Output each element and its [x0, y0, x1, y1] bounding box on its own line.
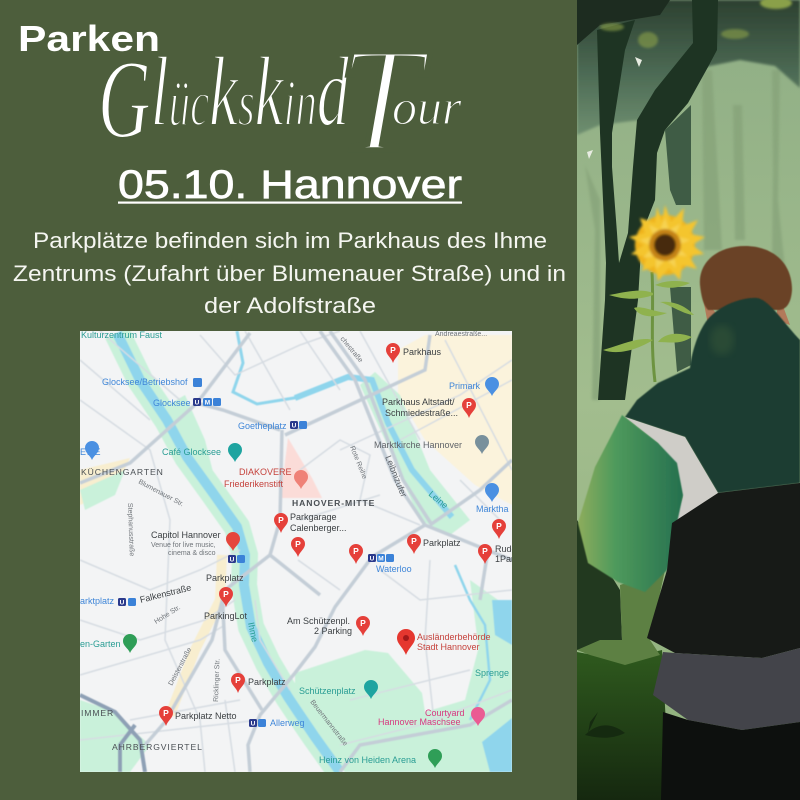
map pin: parking centre: P [295, 539, 301, 549]
map pin: Parkplatz south [231, 673, 245, 693]
map labels: streets and districts: en-Garten [80, 639, 121, 649]
map labels: streets and districts: Glocksee/Betriebshof [102, 377, 188, 387]
map pin: parking centre [291, 537, 305, 557]
heading: Glückskind Tour: our [392, 79, 462, 135]
map labels: streets and districts: Schützenplatz [299, 686, 356, 696]
map pin: Am Schützenplatz: P [360, 618, 366, 628]
map labels: streets and districts: EWE [80, 447, 101, 457]
map pin: Parkplatz Leine [407, 534, 421, 554]
map labels: streets and districts: Leibnizufer [383, 454, 409, 499]
map icons: transit and places: U [292, 422, 297, 430]
ground plant shadows [585, 712, 625, 738]
heading: Glückskind Tour: ückskind [169, 37, 349, 148]
map labels: streets and districts: Stadt Hannover [417, 642, 480, 652]
map labels: streets and districts: Beuermannstraße [308, 699, 348, 747]
map labels: streets and districts: Friederikenstift [224, 479, 284, 489]
map labels: streets and districts: Hohe Str. [153, 604, 182, 626]
map labels: streets and districts: Calenberger... [290, 523, 347, 533]
map labels: streets and districts: Primark [449, 381, 480, 391]
canopy leaves [600, 0, 792, 48]
map labels: streets and districts [80, 330, 517, 765]
map pin: Parkgarage Calenberger [274, 513, 288, 533]
map pin: parking east edge: P [496, 521, 502, 531]
map labels: streets and districts: Venue for live music, [151, 542, 216, 549]
map labels: streets and districts: Glocksee [153, 398, 191, 408]
map icons: transit and places: M [378, 556, 384, 562]
map labels: streets and districts: Courtyard [425, 708, 465, 718]
map labels: streets and districts: Sprenge [475, 668, 509, 678]
illustration: forest and person [577, 0, 800, 800]
map labels: streets and districts: Waterloo [376, 564, 412, 574]
person: green sleeve [578, 415, 683, 592]
person: grey hem [653, 648, 800, 730]
map icons: transit and places: U [251, 720, 256, 728]
heading: Glückskind Tour: l [151, 37, 169, 148]
map pin: ParkingLot [219, 587, 233, 607]
map labels: streets and districts: Blumenauer Str. [137, 479, 185, 508]
map labels: streets and districts: Ausländerbehörde [417, 632, 491, 642]
map labels: streets and districts: Goetheplatz [238, 421, 287, 431]
background trees [585, 70, 785, 400]
map icons: transit and places: U [195, 400, 200, 406]
map labels: streets and districts: Hannover Maschsee [378, 717, 461, 727]
map icons: transit and places: U [230, 556, 235, 564]
person: jacket hood [625, 298, 800, 493]
map labels: streets and districts: Rude [495, 544, 517, 554]
map pin: Ausländerbehörde destination [397, 629, 415, 655]
person: black torso [647, 483, 800, 658]
map pin: Rude parking: P [482, 546, 488, 556]
map pin: Parkplatz Netto [159, 706, 173, 726]
person: hair and skin [700, 246, 792, 325]
main dark trunks [597, 0, 718, 400]
map labels: streets and districts: Parkplatz Netto [175, 711, 237, 721]
sunflower [603, 205, 705, 382]
map labels: streets and districts: arktplatz [80, 596, 115, 606]
map labels: streets and districts: Parkhaus [403, 347, 442, 357]
map labels: streets and districts: KÜCHENGARTEN [81, 467, 164, 477]
map labels: streets and districts: Schmiedestraße... [385, 408, 458, 418]
map labels: streets and districts: Parkplatz [423, 538, 461, 548]
map labels: streets and districts: Deisterstraße [168, 646, 194, 687]
text block: parking description: Zentrums (Zufahrt über Blumenauer Straße) und in [13, 261, 566, 286]
map labels: streets and districts: 2 Parking [314, 626, 352, 636]
map labels: streets and districts: Rote Reihe [348, 445, 368, 480]
heading: Glückskind Tour: G [98, 39, 151, 162]
map labels: streets and districts: HANOVER-MITTE [292, 498, 375, 508]
map labels: streets and districts: Parkplatz [248, 677, 286, 687]
map labels: streets and districts: Ricklinger Str. [213, 659, 222, 702]
map labels: streets and districts: Stephanusstraße [126, 503, 135, 556]
map icons: transit and places: U [120, 600, 125, 606]
map labels: streets and districts: Marktkirche Hannover [374, 440, 462, 450]
heading: date and city: 05.10. Hannover [118, 163, 462, 207]
map labels: streets and districts: AHRBERGVIERTEL [112, 742, 203, 752]
person: white panel [625, 417, 718, 522]
map labels: streets and districts: IMMER [81, 708, 114, 718]
map labels: streets and districts: Kulturzentrum Faust [81, 330, 163, 340]
text block: parking description: der Adolfstraße [204, 293, 376, 318]
map pin: Rude parking [478, 544, 492, 564]
map labels: streets and districts: ParkingLot [204, 611, 248, 621]
map labels: streets and districts: Café Glocksee [162, 447, 221, 457]
map icons: transit and places: U [370, 556, 375, 562]
map pin: Parkplatz Leine: P [411, 536, 417, 546]
map labels: streets and districts: 1Par [495, 554, 514, 564]
map labels: streets and districts: cinema & disco [168, 550, 216, 557]
map labels: streets and districts: Am Schützenpl. [287, 616, 350, 626]
map of Hannover parking [80, 330, 517, 772]
map pin: Parkplatz south: P [235, 675, 241, 685]
heading: Parken: Parken [18, 18, 160, 59]
map labels: streets and districts: Capitol Hannover [151, 530, 221, 540]
map pin: Am Schützenplatz [356, 616, 370, 636]
canopy [577, 0, 800, 135]
map pin: parking Waterloo: P [353, 546, 359, 556]
map labels: streets and districts: Andreaestraße... [435, 331, 487, 338]
person: trousers [661, 712, 800, 800]
map pin: parking Waterloo [349, 544, 363, 564]
map labels: streets and districts: Allerweg [270, 718, 305, 728]
map icons: transit and places: M [205, 400, 210, 406]
ground [577, 650, 670, 800]
map labels: streets and districts: Leine [427, 489, 450, 511]
map pin: Parkhaus Altstadt [462, 398, 476, 418]
heading: Glückskind Tour [98, 17, 462, 183]
map pin: Parkplatz Netto: P [163, 708, 169, 718]
map pin: ParkingLot: P [223, 589, 229, 599]
map labels: streets and districts: Parkplatz [206, 573, 244, 583]
back trunk [665, 105, 691, 372]
text block: parking description: Parkplätze befinden sich im Parkhaus des Ihme [33, 228, 547, 253]
map labels: streets and districts: Ihme [246, 621, 260, 643]
map labels: streets and districts: chestraße [338, 336, 364, 364]
map labels: streets and districts: Falkenstraße [139, 582, 192, 605]
map pin: Parkhaus Altstadt: P [466, 400, 472, 410]
map icons: transit and places [85, 377, 499, 768]
map pin: parking east edge [492, 519, 506, 539]
map labels: streets and districts: Parkhaus Altstadt/ [382, 397, 455, 407]
map pin: Parkhaus [386, 343, 400, 363]
map labels: streets and districts: Heinz von Heiden Arena [319, 755, 416, 765]
text block: parking description [13, 228, 566, 318]
map labels: streets and districts: Marktha [476, 504, 509, 514]
map pin: Parkhaus: P [390, 345, 396, 355]
map labels: streets and districts: Parkgarage [290, 512, 337, 522]
map labels: streets and districts: DIAKOVERE [239, 467, 292, 477]
map pin: Parkgarage Calenberger: P [278, 515, 284, 525]
heading: Glückskind Tour: T [338, 17, 431, 183]
butterflies [587, 57, 642, 159]
person: hood highlight [712, 327, 732, 353]
